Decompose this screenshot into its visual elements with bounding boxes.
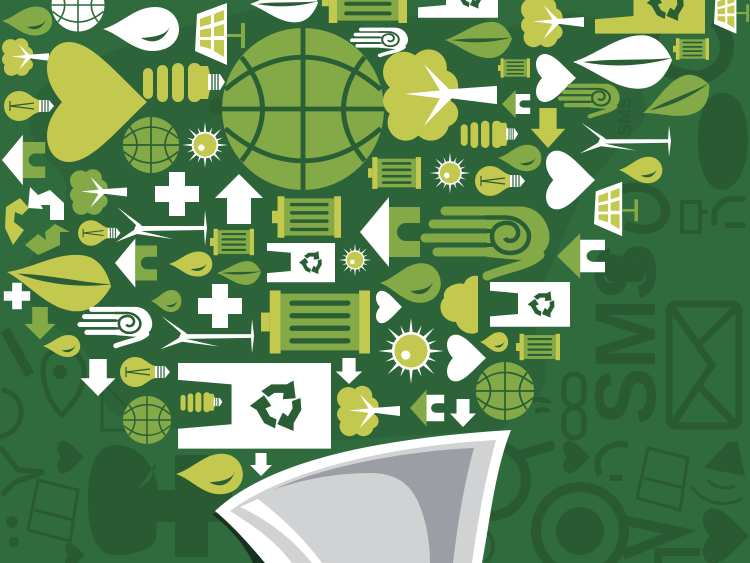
- turbine lower: [160, 316, 254, 353]
- heart white 3: [447, 335, 486, 381]
- drop small mid: [151, 290, 181, 312]
- tree small left: [2, 38, 49, 76]
- small globe: [123, 117, 179, 173]
- bin small: [210, 229, 254, 255]
- solar panel: [195, 3, 245, 65]
- bin lower right: [516, 334, 560, 360]
- bg cursor: [0, 447, 44, 495]
- bg left arc: [0, 390, 21, 437]
- bg arcs: [692, 480, 742, 503]
- cfl bulb: [143, 63, 225, 102]
- bg hat: [704, 442, 745, 476]
- white leaf top: [250, 0, 318, 22]
- bg envelope: [669, 304, 739, 426]
- bin right: [673, 38, 709, 60]
- blade dark crescent: [273, 448, 474, 563]
- heart white 2: [546, 151, 595, 209]
- bg arc bottom: [485, 530, 493, 562]
- white drop: [103, 7, 179, 51]
- arrow small: [336, 358, 362, 384]
- bag white: [267, 243, 335, 282]
- bg big plus: [140, 455, 232, 557]
- arrow olive: [531, 108, 565, 148]
- cfl lower: [181, 392, 222, 412]
- arrow small lower: [250, 453, 272, 476]
- bg book right: [637, 448, 688, 510]
- leaf mid top: [445, 22, 512, 58]
- bg headphones lower: [597, 444, 628, 478]
- drop olive: [169, 251, 212, 277]
- wind turbine: [116, 207, 207, 246]
- plus small: [4, 283, 30, 309]
- bg blob upper centre: [23, 4, 646, 445]
- globe right: [476, 362, 534, 420]
- white globe top: [52, 0, 104, 31]
- return arrow: [28, 187, 64, 220]
- bg notes: [6, 516, 18, 528]
- sun large: [378, 318, 444, 384]
- sun centre: [430, 152, 470, 194]
- drop mid centre: [380, 263, 441, 303]
- drop mid top left: [2, 6, 52, 36]
- house lower: [410, 389, 444, 427]
- drop olive large: [176, 454, 243, 494]
- solar panel top right: [714, 0, 749, 34]
- hand white top: [352, 28, 408, 55]
- cloud olive: [440, 276, 478, 334]
- tree lower: [337, 386, 400, 436]
- turbine right: [580, 123, 671, 157]
- bg headphones: [714, 199, 745, 225]
- blade inner white strip: [240, 499, 322, 563]
- bg eye left: [43, 350, 84, 415]
- bg wifi: [530, 399, 550, 412]
- bg heart left: [57, 441, 84, 473]
- tree top: [521, 0, 584, 47]
- bag top white: [418, 0, 498, 18]
- drop olive right: [619, 157, 662, 183]
- bg speech bubble right: [698, 93, 748, 190]
- large tree: [383, 49, 497, 141]
- trash bin top: [322, 0, 407, 23]
- axe blade shape: [212, 430, 511, 563]
- arrow white: [80, 359, 116, 396]
- large globe: [222, 28, 384, 190]
- sun small: [338, 244, 372, 276]
- bg book left: [28, 480, 78, 541]
- house: [2, 135, 45, 185]
- heart small: [376, 291, 402, 323]
- bag top olive: [595, 0, 705, 34]
- heart white: [536, 54, 576, 102]
- bg tool bottom right top: [600, 254, 650, 282]
- bg chain: [564, 374, 584, 438]
- leaf tilted: [636, 68, 717, 131]
- bg heart bottom left: [65, 543, 85, 563]
- bg swoop top right: [651, 20, 727, 78]
- drop mid: [498, 145, 541, 171]
- house 2: [115, 238, 157, 288]
- bg magnifier: [454, 444, 550, 516]
- bin small top: [498, 58, 530, 78]
- house small: [502, 90, 530, 118]
- large bag: [178, 363, 331, 449]
- drop olive small: [43, 335, 80, 357]
- arrow mid: [24, 307, 56, 340]
- blade shadow: [212, 510, 272, 563]
- bg speech bubble left: [88, 445, 158, 555]
- bg corner square: [658, 552, 700, 563]
- bg eye left pupil: [53, 365, 67, 379]
- bg SMS text: SMS: [578, 243, 674, 425]
- bg ring behind panel: [620, 187, 666, 229]
- leaf white: [573, 35, 672, 89]
- bg small camera: [682, 202, 708, 232]
- leaf mid: [217, 261, 261, 285]
- bulb left: [4, 91, 54, 121]
- large olive leaf: [3, 244, 115, 316]
- sun: [182, 122, 228, 168]
- large bin: [261, 290, 370, 354]
- globe lower: [123, 396, 171, 444]
- tree mid: [70, 169, 127, 215]
- bg heart far right: [703, 508, 749, 563]
- bin: [272, 196, 341, 238]
- blade white outline: [215, 430, 511, 563]
- cfl small: [461, 121, 518, 148]
- arrow small right: [450, 399, 476, 427]
- hand mid: [560, 84, 620, 116]
- house right: [557, 233, 605, 279]
- bag right: [490, 282, 570, 327]
- recycle olive part: [5, 198, 29, 245]
- recycle mid part: [25, 224, 70, 255]
- bg magnifier left: [5, 330, 30, 375]
- big hand: [425, 206, 550, 276]
- blade grey fill: [230, 440, 496, 563]
- bin centre: [368, 157, 421, 189]
- bg dark spot near globe: [209, 98, 225, 114]
- bg small SMS text: SMS: [615, 97, 635, 136]
- plus centre: [198, 284, 242, 328]
- bg heart right: [563, 441, 590, 473]
- drop small: [480, 332, 508, 352]
- big heart: [47, 42, 147, 162]
- bg eye ring: [536, 487, 680, 563]
- bg note: [9, 537, 19, 547]
- bulb centre: [475, 166, 525, 196]
- bg envelope left: [102, 380, 140, 430]
- bulb lower: [120, 357, 170, 387]
- hand white: [80, 307, 152, 346]
- solar panel lower: [594, 182, 638, 236]
- plus: [155, 172, 199, 216]
- big house: [360, 197, 420, 267]
- bulb small: [78, 220, 120, 246]
- arrow up: [215, 174, 263, 224]
- bg eye pupil: [556, 507, 604, 555]
